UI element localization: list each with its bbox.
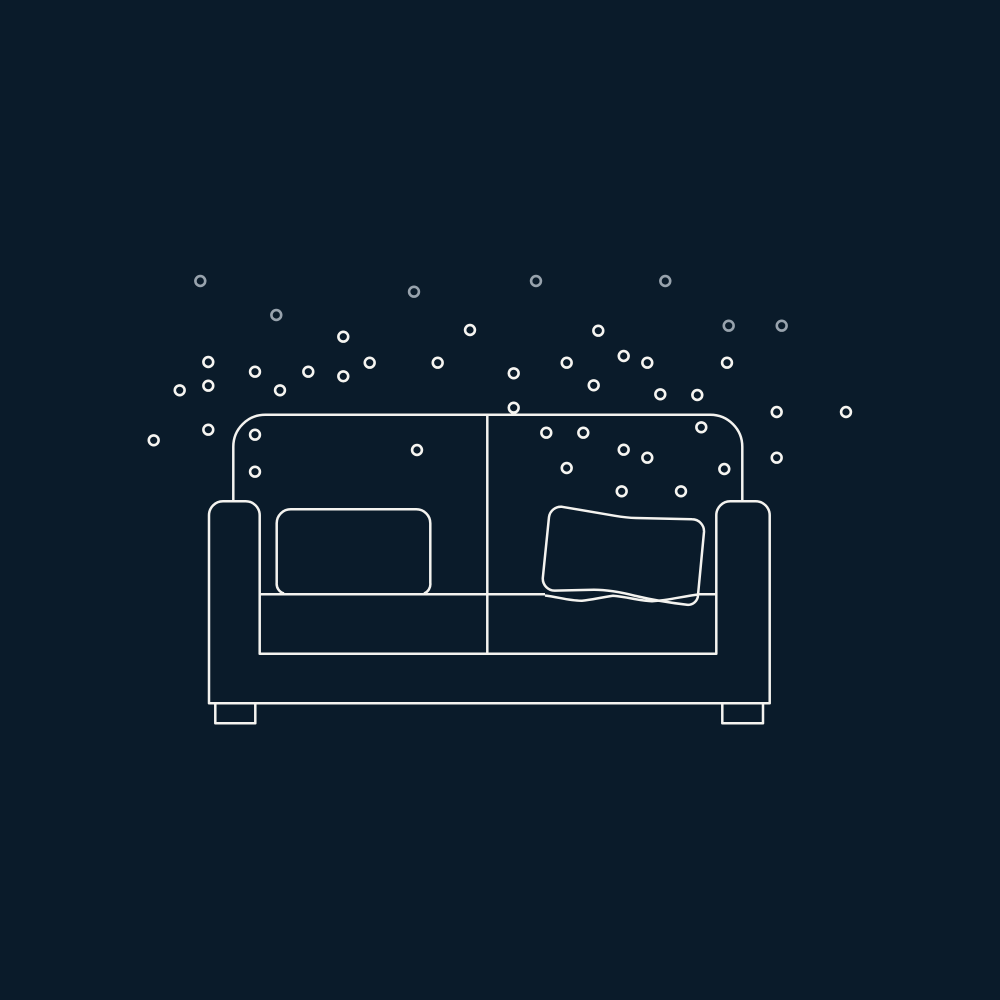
sofa back [233,415,742,501]
right pillow [543,507,704,605]
sofa [209,415,770,723]
left pillow [277,509,430,594]
arms and base [209,501,770,703]
centre divider [486,415,489,654]
dust particles: faded [195,276,787,331]
left leg [215,703,255,723]
right leg [722,703,763,723]
seat line [260,593,716,596]
dust particles: bright [149,325,851,496]
pillow lower crease [545,594,698,601]
